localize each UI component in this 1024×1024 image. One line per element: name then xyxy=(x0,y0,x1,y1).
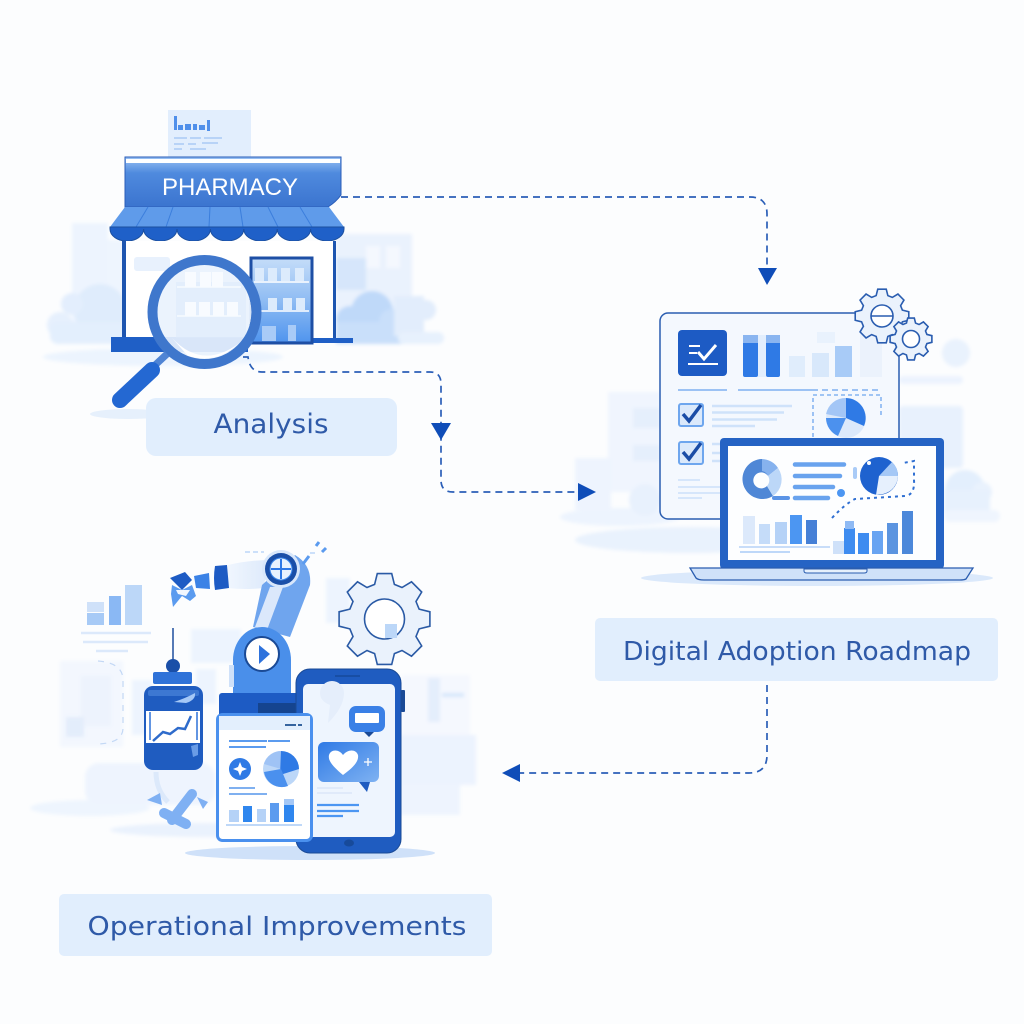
left bar chart xyxy=(739,515,830,552)
striped awning xyxy=(110,207,344,241)
label box: Operational Improvements: Operational Improvements xyxy=(88,912,466,942)
laptop shadow xyxy=(641,570,993,586)
robot base block xyxy=(219,693,299,723)
connector arrow: pharmacy to roadmap xyxy=(341,197,777,285)
blue wrench shapes xyxy=(147,772,208,824)
donut chart xyxy=(742,459,790,500)
heart chat bubble xyxy=(318,742,379,792)
connector arrow: analysis to roadmap xyxy=(243,357,596,501)
faded background scenery behind robot xyxy=(30,578,476,837)
dotted trend line xyxy=(832,461,914,518)
large gear icon xyxy=(339,574,430,664)
pharmacy sign: PHARMACY xyxy=(162,174,298,201)
laptop xyxy=(690,438,973,580)
document pie chart xyxy=(263,751,299,787)
pharmacy sign xyxy=(125,157,341,207)
shop window with shelves xyxy=(251,258,312,343)
laptop text lines xyxy=(795,464,844,498)
label box: Operational Improvements xyxy=(59,894,492,956)
checkbox rows xyxy=(678,404,792,498)
label box: Analysis xyxy=(146,398,397,456)
label box: Digital Adoption Roadmap xyxy=(595,618,998,681)
phone text lines xyxy=(317,788,352,793)
medicine bottle with trend chart xyxy=(144,628,203,770)
smartphone xyxy=(296,669,405,853)
robot arm xyxy=(170,542,326,693)
gears icon xyxy=(855,289,932,360)
dashed outline of faded panel xyxy=(98,661,123,744)
ground shadow under magnifier handle xyxy=(90,409,166,419)
report document xyxy=(218,714,312,840)
checklist tile icon xyxy=(678,330,727,376)
divider xyxy=(678,389,812,391)
right bar chart xyxy=(833,511,913,554)
small chat bubble xyxy=(349,706,385,737)
small bar chart top left xyxy=(81,585,151,651)
laptop pie chart xyxy=(853,457,898,495)
dashed pie chart xyxy=(813,395,881,438)
device shadow xyxy=(185,846,435,860)
shop building xyxy=(111,241,353,352)
label box: Analysis: Analysis xyxy=(214,409,328,440)
illustration: digital roadmap dashboard and laptop xyxy=(560,289,1000,586)
illustration: pharmacy storefront with magnifier xyxy=(43,110,444,400)
plus badge icon xyxy=(229,758,251,780)
faded background scenery behind dashboard xyxy=(560,339,1000,553)
laptop base xyxy=(690,568,973,580)
document bar chart xyxy=(226,799,302,825)
floating report sheet xyxy=(168,110,251,158)
laptop screen frame xyxy=(720,438,944,569)
illustration: operational improvements robot, bottle and devices xyxy=(30,542,476,860)
label box: Digital Adoption Roadmap: Digital Adoption Roadmap xyxy=(623,637,971,667)
dashboard panel xyxy=(660,313,899,519)
dashboard bar chart xyxy=(743,332,882,377)
magnifying glass xyxy=(120,260,256,400)
connector arrow: roadmap to operational improvements xyxy=(502,685,767,782)
faint speech shape xyxy=(320,681,344,723)
faded background scenery behind pharmacy xyxy=(43,223,444,366)
